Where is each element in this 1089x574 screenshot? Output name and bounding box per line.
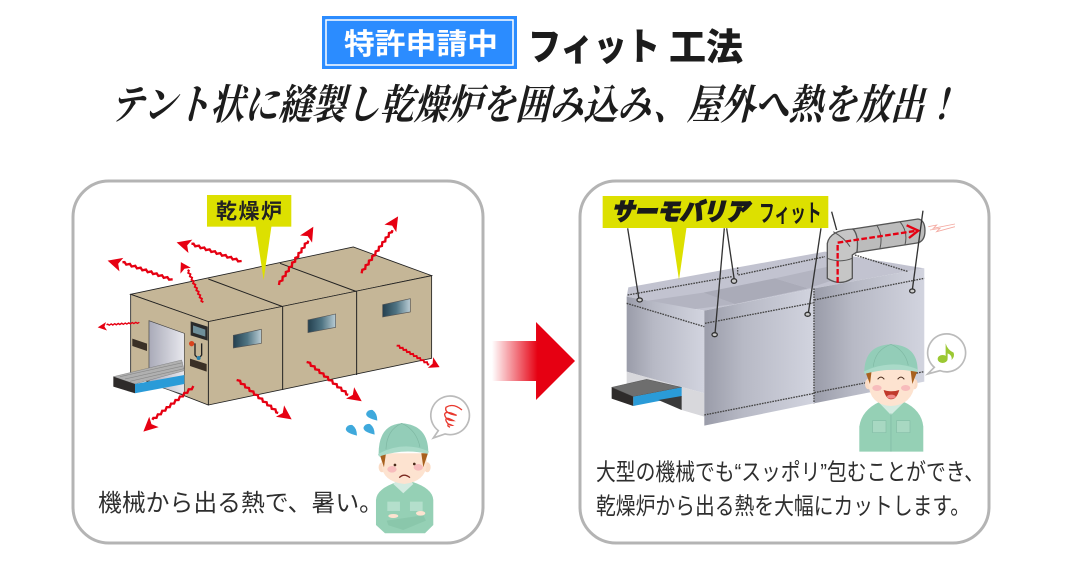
speech bubble: frustration <box>431 396 469 438</box>
label: Thermo Barrier Fit: サーモバリア <box>610 199 753 226</box>
suspension ropes <box>628 211 923 337</box>
worried worker <box>376 423 433 533</box>
duct <box>827 219 955 283</box>
panel: with the tent <box>580 181 989 543</box>
label: drying furnace: 乾燥炉 <box>216 200 282 223</box>
subtitle: テント状に縫製し乾燥炉を囲み込み、屋外へ熱を放出！ <box>108 82 967 128</box>
caption: 乾燥炉から出る熱を大幅にカットします。 <box>596 493 970 519</box>
label: Thermo Barrier Fit <box>603 196 828 280</box>
label: drying furnace <box>207 195 291 280</box>
caption: 機械から出る熱で、暑い。 <box>98 490 383 517</box>
panel: without the tent <box>73 181 483 543</box>
title: フィット <box>528 27 660 69</box>
drying furnace illustration <box>113 247 432 405</box>
badge: patent pending: 特許申請中 <box>344 28 498 61</box>
happy worker <box>859 344 923 452</box>
title: 工法 <box>669 27 743 68</box>
caption: 大型の機械でも“スッポリ”包むことができ、 <box>596 459 984 485</box>
speech bubble: music note <box>928 334 966 374</box>
label: Thermo Barrier Fit: フィット <box>759 200 822 227</box>
badge: patent pending <box>322 16 517 69</box>
arrow: before to after <box>492 322 575 400</box>
icon: sweat drops <box>346 410 377 436</box>
tent-covered furnace illustration <box>612 211 955 426</box>
heat arrows <box>97 213 442 437</box>
caption <box>596 459 984 519</box>
